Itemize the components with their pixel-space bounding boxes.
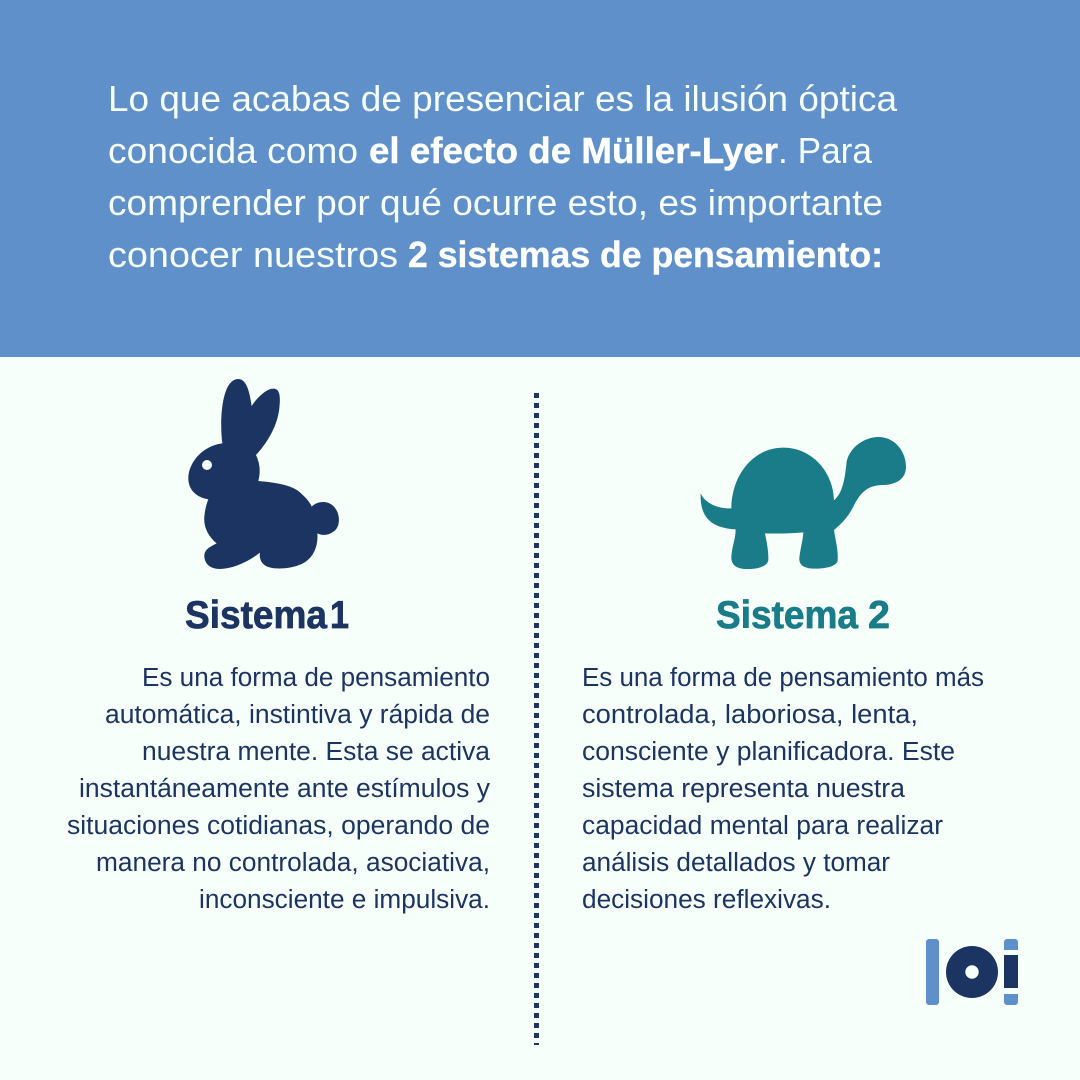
heading: Sistema 1: 1 xyxy=(330,594,349,637)
panel: header xyxy=(0,0,1080,357)
text block: Sistema 2 description: análisis detallados y tomar xyxy=(582,849,891,877)
text block: Sistema 2 description: consciente y planificadora. Este xyxy=(582,738,955,766)
heading: Sistema 2: Sistema xyxy=(716,594,859,637)
text block: Sistema 2 description: controlada, laboriosa, lenta, xyxy=(582,701,918,729)
text block: Sistema 1 description: instantáneamente ante estímulos y xyxy=(79,775,490,803)
text block: Sistema 2 description: capacidad mental para realizar xyxy=(582,812,944,840)
text block: Sistema 1 description: inconsciente e impulsiva. xyxy=(199,886,490,914)
text block: Sistema 2 description: sistema representa nuestra xyxy=(582,775,906,803)
text block: Sistema 1 description xyxy=(67,664,491,914)
text block: intro xyxy=(108,78,898,275)
text block: Sistema 1 description: nuestra mente. Esta se activa xyxy=(142,738,491,766)
text block: Sistema 1 description: Es una forma de pensamiento xyxy=(142,664,490,692)
heading: Sistema 1: Sistema xyxy=(185,594,328,637)
text block: intro: 2 sistemas de pensamiento: xyxy=(408,234,883,275)
icon: rabbit xyxy=(188,379,339,569)
text block: intro: comprender por qué ocurre esto, es importante xyxy=(108,182,883,223)
heading: Sistema 2: 2 xyxy=(868,594,890,637)
text block: intro: conocer nuestros xyxy=(108,234,398,275)
text block: intro: . Para xyxy=(778,130,873,171)
text block: Sistema 2 description xyxy=(582,664,984,914)
text block: intro: Lo que acabas de presenciar es la ilusión óptica xyxy=(108,78,898,119)
text block: Sistema 1 description: manera no controlada, asociativa, xyxy=(96,849,490,877)
text block: Sistema 1 description: automática, instintiva y rápida de xyxy=(105,701,490,729)
dotted divider xyxy=(534,393,539,1045)
text block: Sistema 2 description: Es una forma de pensamiento más xyxy=(582,664,984,692)
text block: intro: el efecto de Müller-Lyer xyxy=(369,130,778,171)
icon: logo xyxy=(926,939,1018,1005)
icon: turtle xyxy=(701,437,906,569)
text block: Sistema 2 description: decisiones reflexivas. xyxy=(582,886,831,914)
text block: intro: conocida como xyxy=(108,130,358,171)
text block: Sistema 1 description: situaciones cotidianas, operando de xyxy=(67,812,490,840)
